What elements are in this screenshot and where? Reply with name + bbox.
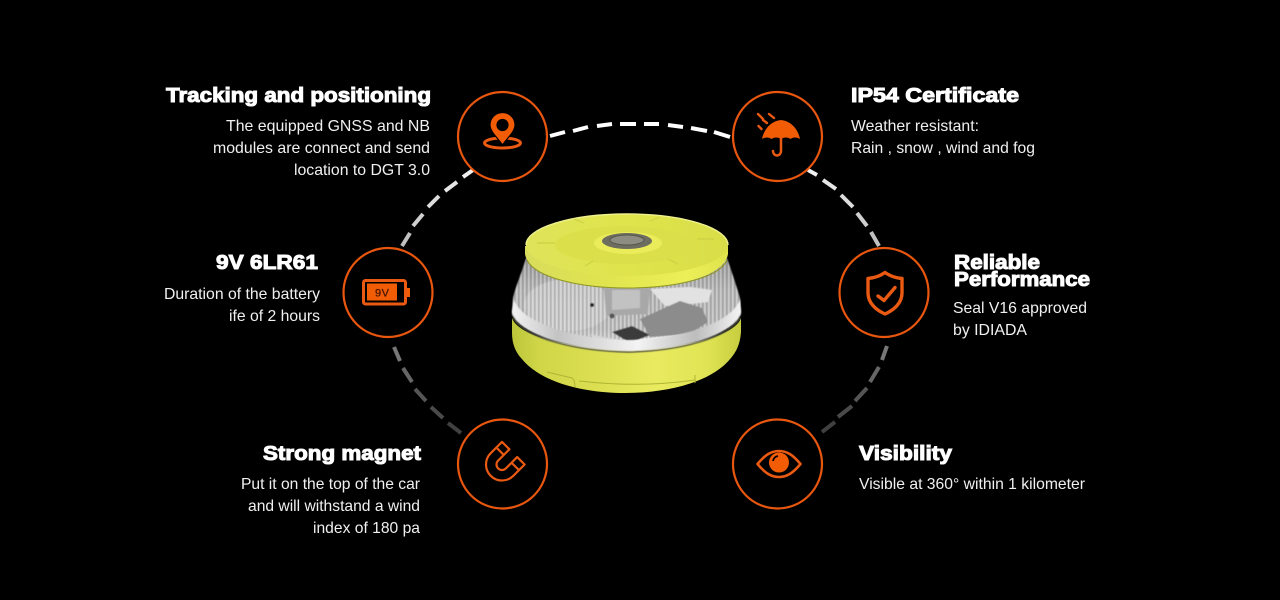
circle — [733, 92, 822, 181]
circle — [458, 420, 547, 508]
description: Duration of the battery — [164, 286, 320, 303]
heading: Performance — [954, 269, 1090, 291]
description: location to DGT 3.0 — [294, 162, 430, 179]
icon: 9V battery: 9V — [375, 288, 390, 300]
product: yellow warning beacon — [512, 214, 741, 393]
beacon chrome ring — [512, 299, 741, 352]
circle — [458, 92, 547, 181]
description — [851, 118, 1035, 157]
heading: Strong magnet — [263, 443, 421, 465]
feature: reliable performance — [840, 248, 1090, 339]
description: Weather resistant: — [851, 118, 979, 135]
beacon base seams — [547, 372, 695, 387]
description: Visible at 360° within 1 kilometer — [859, 476, 1086, 493]
dashed ring: lower right arc — [822, 346, 887, 432]
description: ife of 2 hours — [229, 308, 320, 325]
heading: 9V 6LR61 — [216, 252, 318, 274]
heading: Reliable — [954, 252, 1040, 274]
circle — [840, 248, 928, 337]
icon: location pin — [484, 112, 520, 148]
description — [241, 476, 421, 537]
description: by IDIADA — [953, 322, 1027, 339]
heading: IP54 Certificate — [851, 85, 1019, 107]
description: index of 180 pa — [313, 520, 420, 537]
description: modules are connect and send — [213, 140, 430, 157]
feature: tracking and positioning — [166, 85, 547, 181]
heading: Tracking and positioning — [166, 85, 431, 107]
dashed ring: upper right arc — [808, 170, 879, 246]
description: Rain , snow , wind and fog — [851, 140, 1035, 157]
feature: IP54 certificate — [733, 85, 1035, 181]
dashed ring: upper left arc — [402, 170, 473, 246]
description — [953, 300, 1087, 339]
feature: battery — [164, 248, 432, 337]
feature: visibility — [733, 420, 1086, 508]
beacon lid — [525, 214, 728, 288]
description: Put it on the top of the car — [241, 476, 421, 493]
beacon base — [512, 318, 741, 393]
icon: shield with check — [868, 272, 902, 314]
icon: magnet — [479, 442, 525, 487]
description: The equipped GNSS and NB — [226, 118, 430, 135]
heading — [954, 252, 1090, 291]
circle — [344, 248, 432, 337]
icon: umbrella and rain — [758, 114, 800, 156]
dashed ring: top arc — [550, 124, 730, 137]
icon: 9V battery — [364, 280, 410, 304]
icon: eye — [758, 451, 800, 477]
beacon glass dome — [512, 258, 741, 349]
description: and will withstand a wind — [248, 498, 420, 515]
circle — [733, 420, 822, 508]
heading: Visibility — [859, 443, 953, 465]
feature: strong magnet — [241, 420, 547, 537]
description — [164, 286, 320, 325]
description — [213, 118, 430, 179]
dashed ring: lower left arc — [394, 347, 461, 433]
description: Seal V16 approved — [953, 300, 1087, 317]
